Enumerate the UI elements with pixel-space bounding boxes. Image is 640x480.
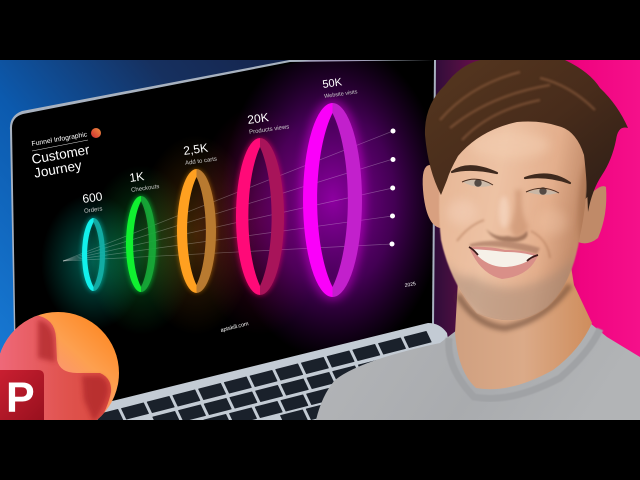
right brow [525,174,570,183]
lid edge [10,58,438,432]
left smile fold [457,220,484,241]
upper fold shade [38,320,55,362]
infographic screen [46,60,434,350]
top letterbox [0,0,640,60]
heading block [30,128,101,181]
logo folds [0,316,112,420]
label: 1K: 1K [128,169,145,185]
ring: 20K product views [236,138,284,295]
hair mass [425,60,628,212]
neck [455,260,592,389]
title: Journey [33,158,83,181]
chin shadow [458,285,570,328]
label: 600: Orders [84,206,103,215]
lower fold shade [82,376,108,422]
nose highlight [499,196,509,228]
stubble [450,260,574,320]
thumbnail scene [0,60,640,420]
kicker: Funnel Infographic [31,131,88,148]
bottom letterbox [0,420,640,480]
red fold [0,316,112,420]
year: 2025 [404,281,417,289]
site url: aptskill.com [220,321,250,334]
funnel lines [63,131,393,261]
PowerPoint logo [0,312,119,420]
keyboard deck [90,323,450,431]
label: 50K: 50K [322,76,343,91]
label: 1K: Checkouts [131,184,160,194]
P letter: P [6,374,35,422]
end dots [390,128,396,246]
label: 2,5K: 2,5K [182,141,209,158]
mouth corners [469,247,538,261]
teeth [472,249,535,267]
label: 50K: Website visits [324,89,358,100]
face details [448,135,586,320]
face [439,116,587,320]
laptop lid [10,58,438,432]
deck [90,323,450,430]
ring: 1K checkouts [126,196,156,292]
title: Customer [30,142,91,167]
glows [46,60,434,350]
ring: 2,5K add to carts [177,169,216,293]
kicker divider [32,140,88,151]
left eye [462,179,493,187]
P tile [0,370,44,420]
forehead highlight [476,135,548,156]
ring: 600 orders [82,218,105,291]
right cheek highlight [544,212,566,233]
label: 600: 600 [81,189,104,206]
nose underside [486,229,528,242]
left ear [423,165,448,228]
pink wall [430,60,640,420]
keys [96,331,431,431]
person [316,60,640,420]
lower lip [469,247,538,279]
right eye [526,187,559,195]
logo disc [0,312,119,434]
right cheek shade [578,164,586,239]
right smile fold [531,231,550,258]
left brow [452,166,497,173]
hair highlights [440,72,595,140]
label: 20K: 20K [246,110,270,127]
nose side shadow [510,190,528,238]
label: 20K: Products views [249,124,290,136]
label: 2,5K: Add to carts [185,156,217,167]
upper lip shade [470,241,540,254]
screen [12,60,434,430]
right ear [578,186,606,243]
ring: 50K website visits [303,103,362,297]
left cheek highlight [448,200,474,224]
collar [449,329,600,398]
shirt [316,323,640,420]
small logo [91,128,101,138]
blue wall [0,60,300,420]
hair underlay [436,90,596,220]
